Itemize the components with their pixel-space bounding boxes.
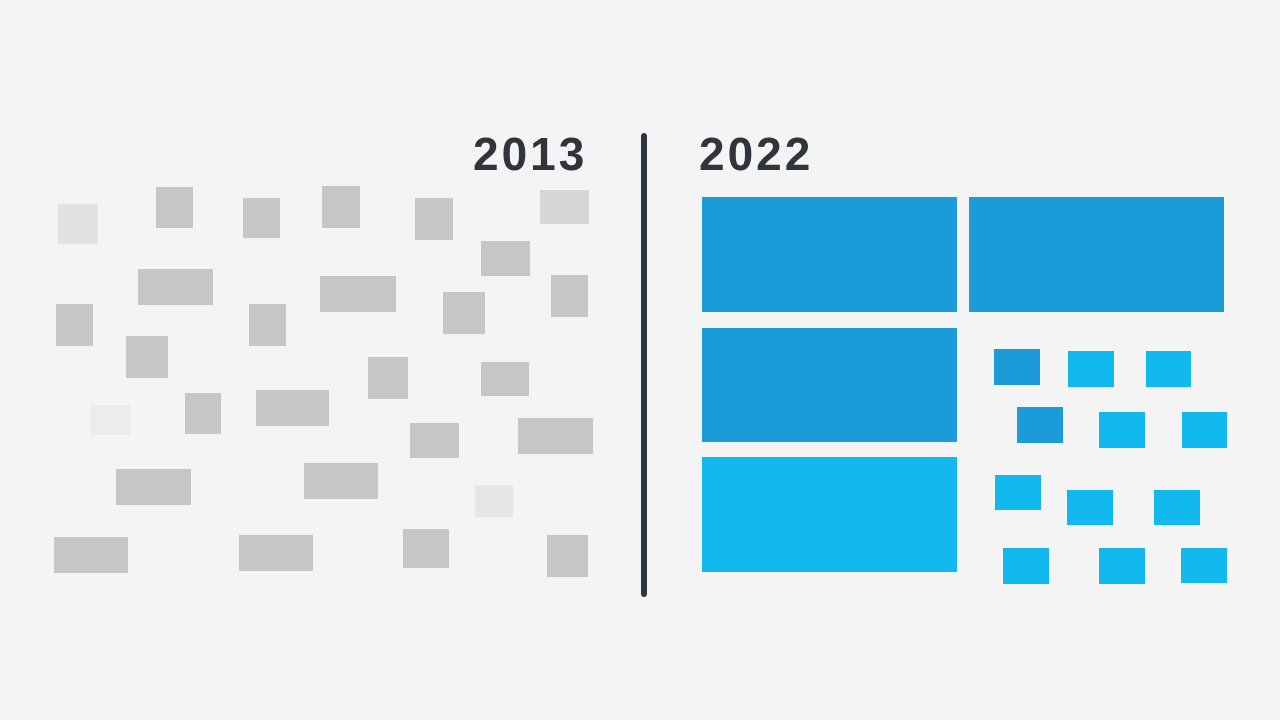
panel: 2022 consolidated blue blocks xyxy=(702,197,1227,584)
divider line xyxy=(641,133,647,597)
panel: 2013 scattered gray blocks xyxy=(54,186,593,577)
title: 2022: 2022 xyxy=(699,128,813,180)
title: 2013: 2013 xyxy=(473,128,587,180)
